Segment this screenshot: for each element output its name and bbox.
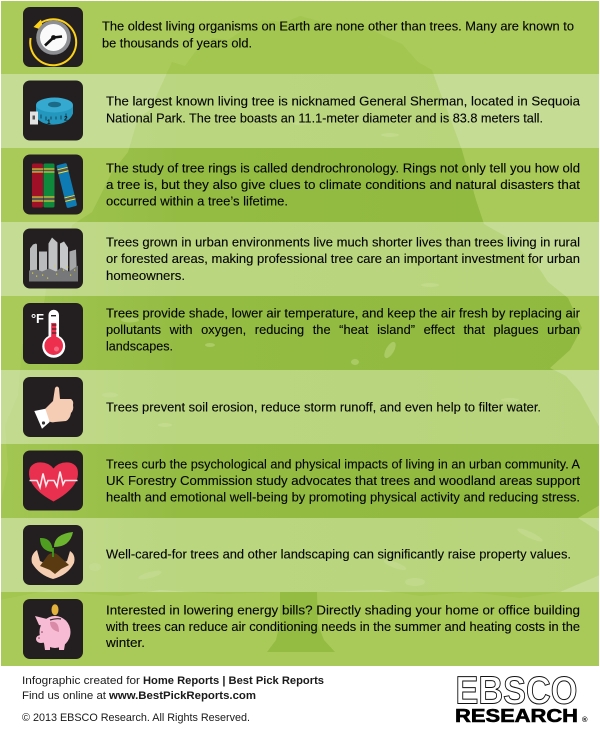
fact text 3: The study of tree rings is called dendrochronology. Rings not only tell you how old (106, 161, 580, 176)
fact text 9: with trees can reduce air conditioning needs in the summer and heating costs in the (105, 619, 580, 634)
icon: books (23, 154, 83, 214)
fact row 2: General Sherman (23, 80, 581, 140)
fact text 1: The oldest living organisms on Earth are none other than trees. Many are known to (102, 18, 574, 34)
footer credits: Find us online at (22, 690, 107, 702)
fact text 4 (106, 235, 580, 283)
fact text 6: Trees prevent soil erosion, reduce storm runoff, and even help to filter water. (106, 400, 541, 415)
icon: clock with yellow arrow (23, 7, 83, 67)
fact text 2 (106, 94, 581, 126)
footer credits: © 2013 EBSCO Research. All Rights Reserved. (22, 712, 250, 724)
fact text 4: homeowners. (106, 268, 185, 283)
icon: thermometer (23, 303, 83, 364)
fact text 7: Trees curb the psychological and physical impacts of living in an urban community. A (106, 456, 580, 471)
fact row 6: soil and water (23, 377, 541, 437)
fact text 7: health and emotional well-being by promoting physical activity and reducing stress. (106, 490, 580, 505)
icon: thermometer: °F (31, 311, 44, 326)
fact text 2: The largest known living tree is nicknamed General Sherman, located in Sequoia (106, 94, 581, 108)
fact row 3: dendrochronology (23, 154, 580, 214)
fact text 3 (106, 161, 580, 209)
fact row 1: oldest organisms (23, 7, 574, 67)
footer credits: www.BestPickReports.com (108, 690, 256, 702)
fact text 2: National Park. The tree boasts an 11.1-meter diameter and is 83.8 meters tall. (106, 110, 543, 126)
logo: EBSCO Research: EBSCO (456, 670, 578, 712)
fact text 5: pollutants with oxygen, reducing the “heat island” effect that plagues urban (106, 322, 580, 337)
footer credits: Home Reports | Best Pick Reports (143, 675, 324, 687)
fact text 9: winter. (105, 635, 145, 650)
fact text 7: UK Forestry Commission study advocates that trees and woodland areas support (106, 473, 580, 488)
fact text 5: landscapes. (106, 339, 173, 354)
fact text 4: Trees grown in urban environments live much shorter lives than trees living in rural (106, 235, 580, 250)
fact row 7: health (23, 450, 580, 510)
icon: measuring tape: 1 (47, 119, 51, 126)
fact text 4: or forested areas, making professional tree care an important investment for urban (106, 251, 580, 266)
fact text 7 (106, 456, 580, 505)
fact row 5: shade and air (23, 303, 581, 364)
footer credits: Infographic created for (22, 675, 140, 687)
icon: measuring tape: 2 (64, 116, 68, 122)
fact text 1: be thousands of years old. (102, 36, 252, 50)
logo: EBSCO Research: ® (582, 715, 588, 724)
logo: EBSCO Research: RESEARCH (455, 706, 578, 726)
fact row 4: urban trees (23, 228, 580, 288)
icon: city skyline (23, 228, 83, 288)
icon: hands holding seedling (23, 525, 83, 585)
fact row 8: property values (23, 525, 571, 585)
fact text 3: a tree is, but they also give clues to climate conditions and natural disasters that (106, 177, 580, 192)
fact text 8: Well-cared-for trees and other landscaping can significantly raise property values. (106, 546, 571, 561)
fact text 5: Trees provide shade, lower air temperature, and keep the air fresh by replacing air (106, 306, 581, 321)
icon: measuring tape (23, 80, 83, 140)
fact text 9: Interested in lowering energy bills? Directly shading your home or office building (106, 602, 580, 617)
icon: piggy bank with coin (23, 599, 83, 659)
icon: heart with pulse (23, 450, 83, 510)
fact row 9: energy bills (23, 599, 580, 659)
fact text 9 (105, 602, 580, 650)
fact text 3: occurred within a tree’s lifetime. (106, 194, 288, 209)
footer credits (22, 675, 324, 724)
icon: thumbs up (23, 377, 83, 437)
fact text 5 (106, 306, 581, 354)
fact text 1 (102, 18, 574, 50)
